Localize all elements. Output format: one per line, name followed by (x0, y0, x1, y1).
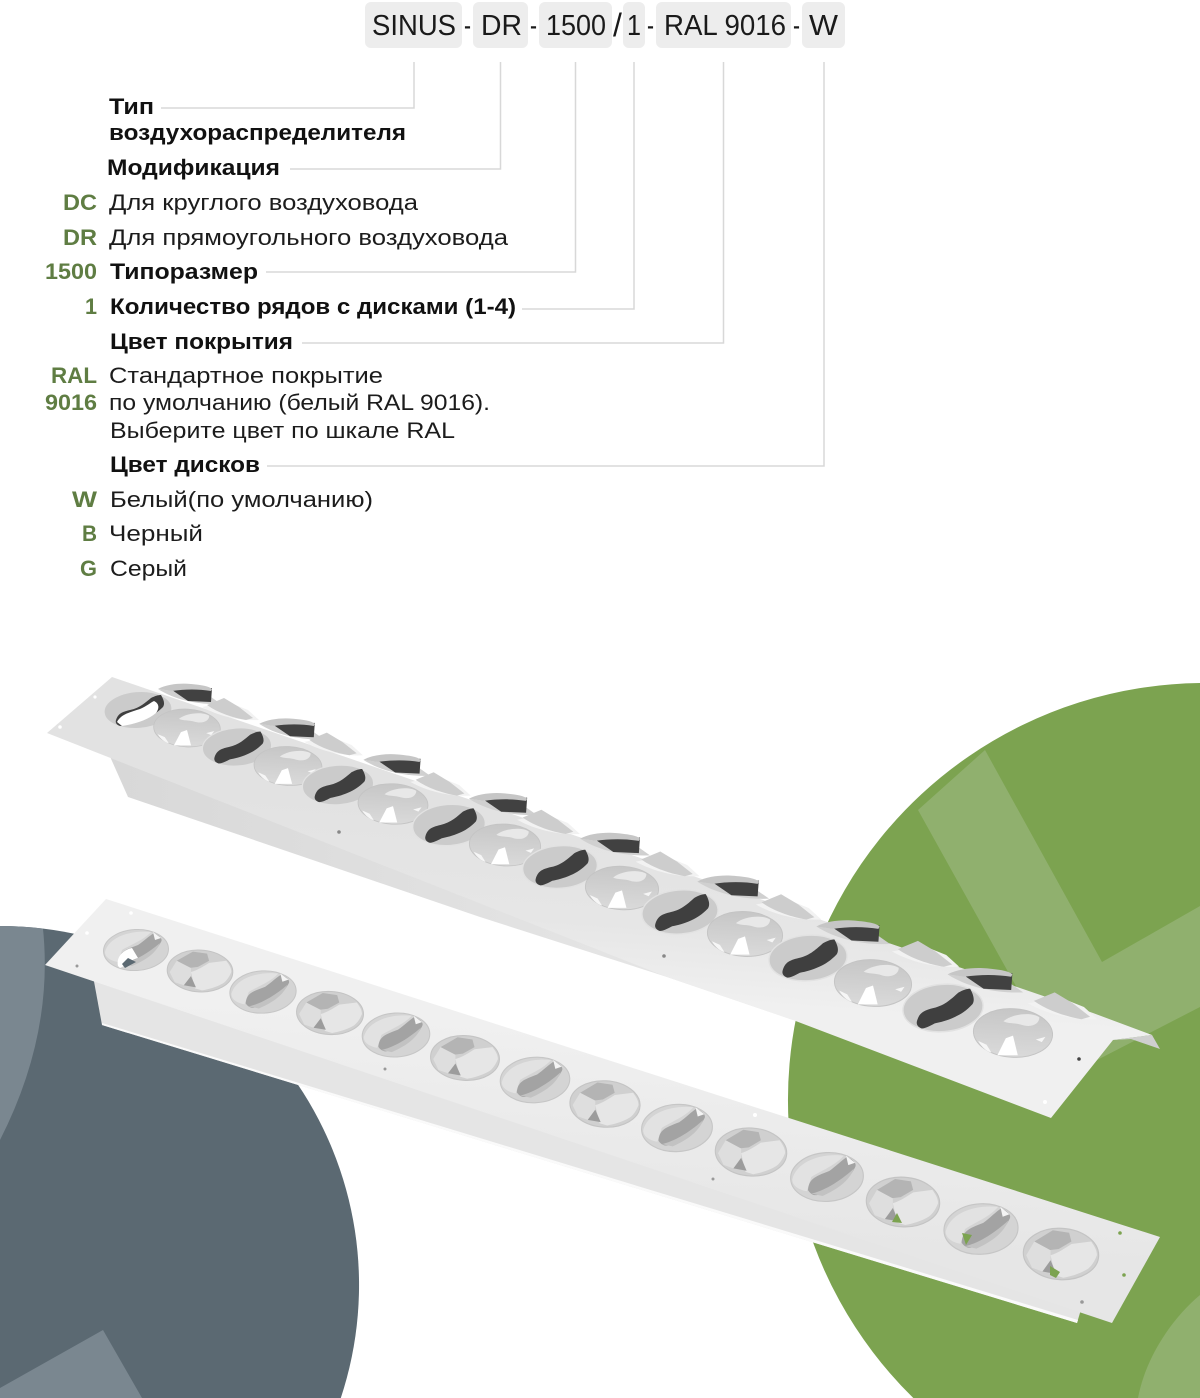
text block: size: 1500 (45, 259, 97, 284)
text block: air distributor type: воздухораспределителя (109, 120, 406, 145)
text block: size: Типоразмер (110, 259, 258, 284)
text block: modification: Модификация (107, 155, 280, 180)
text block: air distributor type (109, 94, 406, 145)
text block: disc colour: G (80, 556, 97, 581)
text block: coating colour: по умолчанию (белый RAL 9016). (109, 390, 490, 415)
text block: disc colour: Цвет дисков (110, 452, 260, 477)
text block: disc colour: B (82, 521, 97, 546)
green circle light band (918, 750, 1200, 1398)
text block: air distributor type: Тип (109, 94, 154, 119)
text block: coating colour: 9016 (45, 390, 97, 415)
connector lines (161, 62, 824, 466)
text block: disc colour: Белый(по умолчанию) (110, 487, 373, 512)
model code chips: SINUS (372, 10, 456, 42)
model code chips (365, 2, 845, 48)
model code chips: - (464, 10, 471, 42)
text block: disc colour (72, 452, 373, 581)
text block: coating colour: Цвет покрытия (110, 329, 293, 354)
text block: modification (63, 155, 509, 250)
text block: disc colour: Черный (109, 521, 203, 546)
text block: rows: Количество рядов с дисками (1-4) (110, 294, 516, 319)
text block: size (45, 259, 258, 284)
dark circle (0, 920, 359, 1398)
text block: disc colour: Серый (110, 556, 187, 581)
text block: modification: Для прямоугольного воздуховода (109, 225, 509, 250)
model code chips: DR (481, 10, 522, 42)
model code chips: 1 (627, 10, 641, 42)
model code chips: RAL 9016 (664, 10, 786, 42)
device: diffuser with discs, lower (45, 899, 1160, 1323)
text block: modification: Для круглого воздуховода (109, 190, 419, 215)
text block: coating colour: RAL (51, 363, 97, 388)
model code chips: W (809, 10, 838, 42)
model code chips: - (793, 10, 800, 42)
green circle (788, 683, 1200, 1398)
text block: modification: DC (63, 190, 97, 215)
text block: coating colour (45, 329, 490, 443)
text block: coating colour: Выберите цвет по шкале RAL (110, 418, 455, 443)
text block: modification: DR (63, 225, 97, 250)
text block: coating colour: Стандартное покрытие (109, 363, 383, 388)
text block: disc colour: W (72, 487, 98, 512)
model code chips: - (530, 10, 537, 42)
dark circle light shapes (0, 920, 142, 1398)
model code chips: - (647, 10, 654, 42)
text block: rows: 1 (85, 294, 97, 319)
model code chips: 1500 (546, 10, 606, 42)
model code chips: / (613, 7, 622, 43)
device: diffuser with discs, upper (47, 677, 1160, 1118)
